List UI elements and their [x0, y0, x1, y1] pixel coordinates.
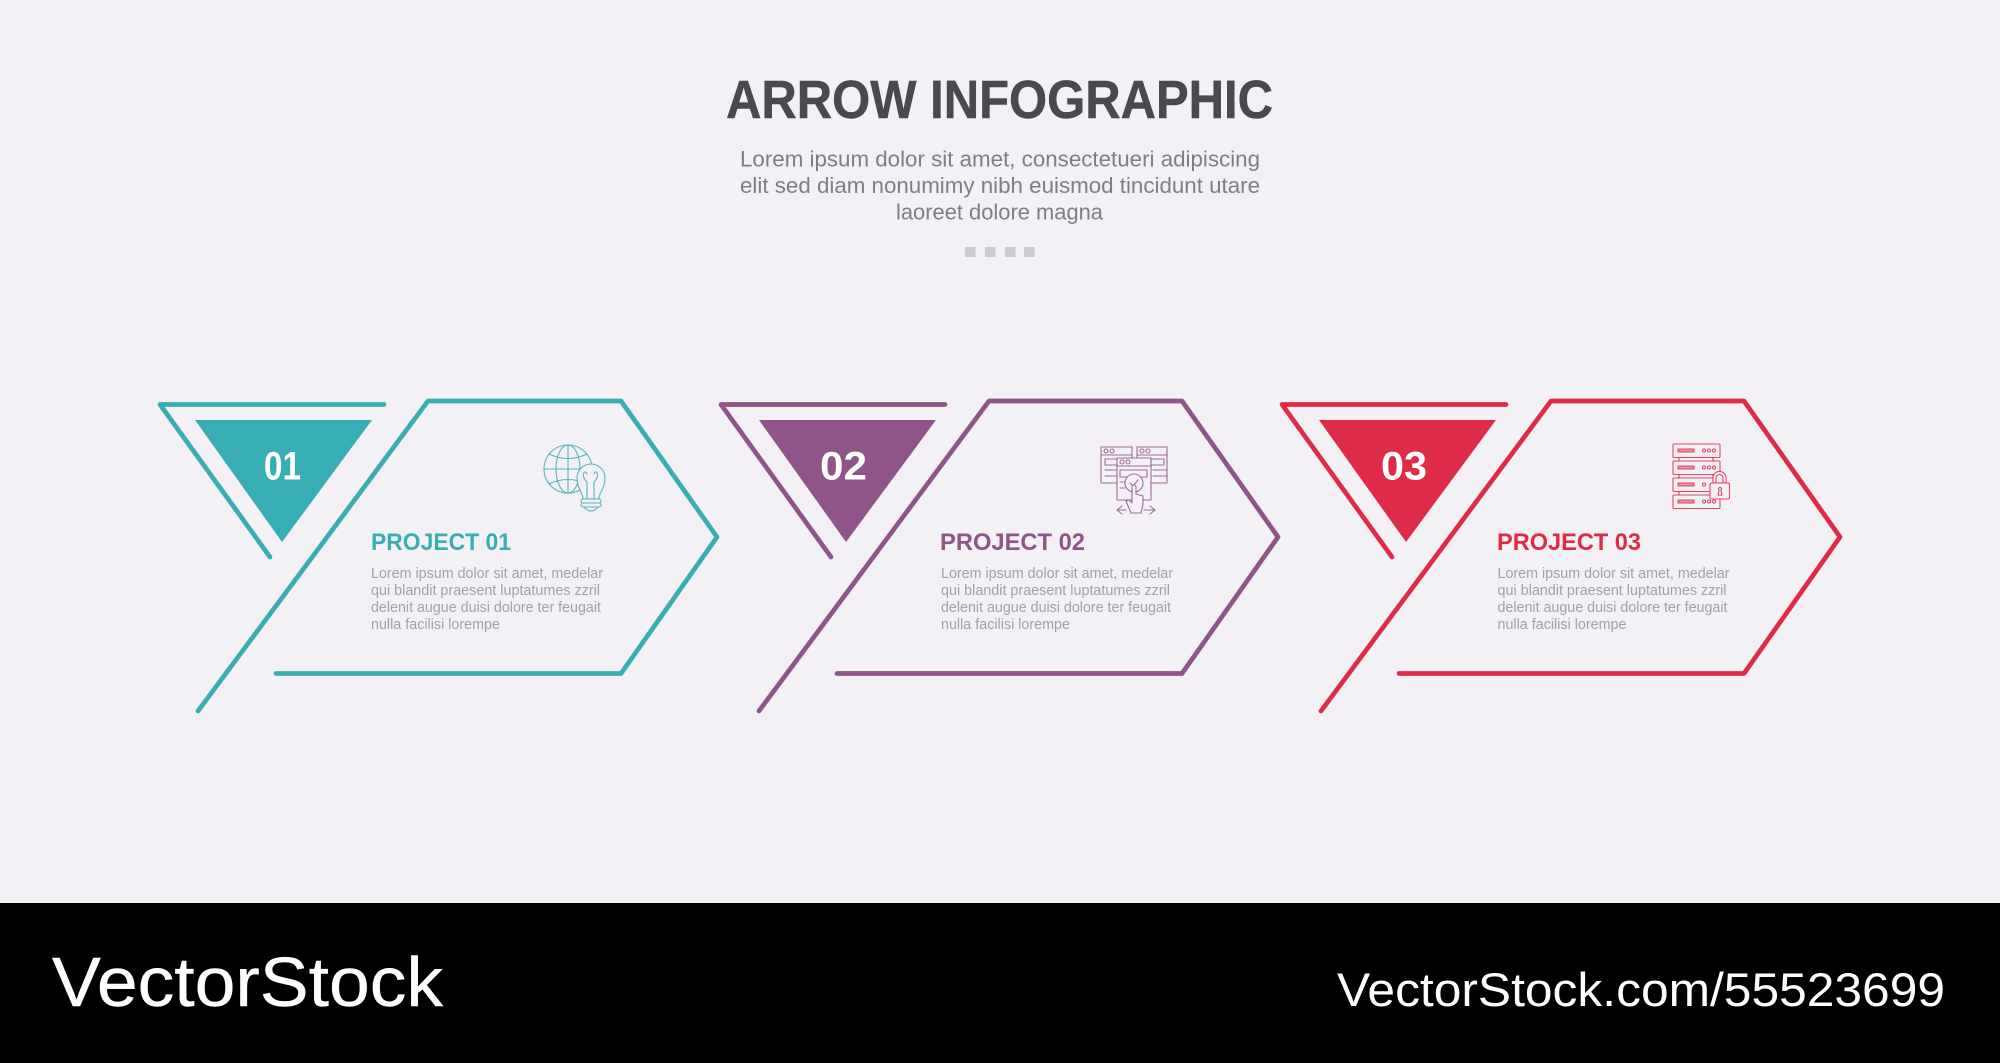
triangle outline	[721, 404, 945, 557]
subtitle text	[740, 146, 1260, 224]
body text: nulla facilisi lorempe	[1498, 616, 1626, 633]
subtitle text: elit sed diam nonumimy nibh euismod tincidunt utare	[740, 173, 1260, 198]
triangle outline	[160, 404, 384, 557]
title: ARROW INFOGRAPHIC	[726, 70, 1273, 130]
body text: delenit augue duisi dolore ter feugait	[941, 599, 1172, 616]
body text: nulla facilisi lorempe	[371, 616, 500, 633]
arrow outline	[759, 401, 1278, 711]
body text: delenit augue duisi dolore ter feugait	[1498, 599, 1728, 616]
number 03: 03	[1381, 444, 1427, 488]
body text	[1498, 565, 1730, 633]
triangle outline	[1282, 404, 1506, 557]
footer url: VectorStock.com/55523699	[1337, 963, 1945, 1016]
body text: Lorem ipsum dolor sit amet, medelar	[941, 565, 1173, 582]
body text: qui blandit praesent luptatumes zzril	[1498, 582, 1726, 599]
panel: project 02	[721, 401, 1278, 711]
body text	[941, 565, 1173, 633]
icon: server with padlock	[1673, 444, 1730, 508]
filled triangle	[195, 420, 372, 542]
footer logo: VectorStock	[52, 943, 444, 1021]
body text	[371, 565, 603, 633]
arrow outline	[198, 401, 717, 711]
icon: globe and light bulb	[544, 445, 605, 511]
body text: Lorem ipsum dolor sit amet, medelar	[1498, 565, 1730, 582]
heading: PROJECT 03	[1497, 529, 1641, 556]
footer bar	[0, 903, 2000, 1063]
heading: PROJECT 01	[371, 529, 511, 556]
pagination dots	[965, 247, 1034, 257]
body text: nulla facilisi lorempe	[941, 616, 1070, 633]
icon: web windows with hand	[1101, 447, 1167, 514]
panel: project 03	[1282, 401, 1840, 711]
subtitle text: laoreet dolore magna	[896, 200, 1104, 224]
number 02: 02	[820, 444, 867, 488]
arrow outline	[1321, 401, 1840, 711]
number 01: 01	[264, 444, 301, 488]
header	[726, 70, 1273, 257]
panel: project 01	[160, 401, 717, 711]
body text: Lorem ipsum dolor sit amet, medelar	[371, 565, 603, 582]
heading: PROJECT 02	[940, 529, 1085, 556]
body text: delenit augue duisi dolore ter feugait	[371, 599, 602, 616]
body text: qui blandit praesent luptatumes zzril	[941, 582, 1170, 599]
filled triangle	[1319, 420, 1496, 542]
body text: qui blandit praesent luptatumes zzril	[371, 582, 600, 599]
subtitle text: Lorem ipsum dolor sit amet, consectetueri adipiscing	[740, 146, 1260, 172]
filled triangle	[759, 420, 936, 542]
